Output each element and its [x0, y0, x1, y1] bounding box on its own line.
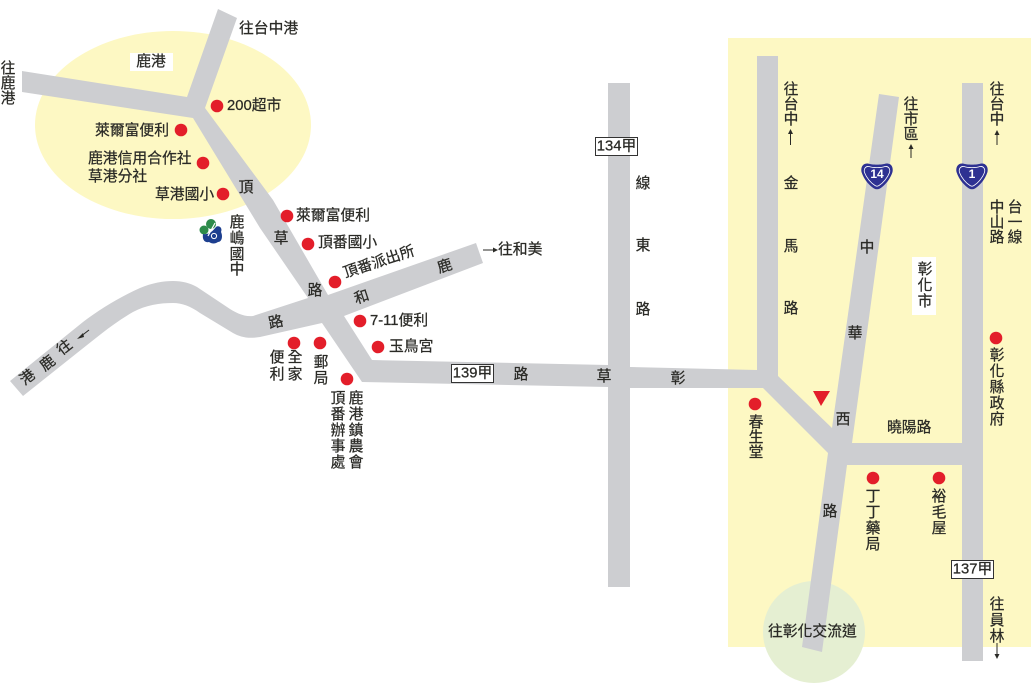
label: 往鹿港 on curved road: 往 [54, 336, 76, 359]
label: 往員林: 往員林 [990, 596, 1005, 645]
road name: 彰草路: 彰 [671, 369, 686, 387]
landmark: 玉鳥宮: 玉鳥宮 [389, 338, 433, 355]
label: 往台中港: 往台中港 [239, 20, 298, 37]
road name: 線東路: 線東路 [636, 175, 651, 318]
landmark: 鹿港信用合作社草港分社: 鹿港信用合作社 [88, 150, 192, 167]
marker: destination triangle [813, 391, 830, 406]
road name: 中華西路: 路 [823, 503, 838, 520]
landmark: 鹿港信用合作社草港分社: 草港分社 [88, 168, 147, 185]
road name: 中華西路 [823, 239, 874, 520]
label: 往彰化交流道: 往彰化交流道 [768, 622, 857, 640]
road network: Changhua side [630, 56, 983, 661]
icon: school logo [200, 219, 222, 244]
landmark: 鹿港鎮農會頂番辦事處 [331, 373, 364, 471]
route shield: 14: 14 [870, 167, 884, 181]
label: 往市區: 往市區 [904, 96, 919, 143]
label: 往台中 west: 往台中 [784, 81, 799, 128]
landmark: 萊爾富便利 Lukang: 萊爾富便利 [95, 121, 169, 139]
road name: 中山路: 中山路 [990, 199, 1005, 246]
road name: 頂草路: 頂 [239, 180, 254, 196]
road network: Lukang side [10, 9, 608, 396]
panel: Lukang area ellipse [35, 31, 311, 219]
route sign: 137甲: 137甲 [953, 561, 992, 577]
label: 往和美 with arrow: 往和美 [498, 241, 543, 258]
label: 往鹿港 on curved road [17, 336, 76, 389]
panel: Changhua city area [728, 38, 1031, 647]
route shield: 14 [861, 163, 893, 189]
landmark: 萊爾富便利: 萊爾富便利 [296, 206, 370, 224]
label: 彰化市 [912, 257, 936, 315]
landmark: 頂番派出所: 頂番派出所 [341, 242, 417, 282]
road name: 台一線: 台一線 [1008, 199, 1023, 246]
road name: 曉陽路: 曉陽路 [887, 419, 932, 436]
label: 鹿嶋國中: 鹿嶋國中 [230, 214, 245, 278]
road name: 彰草路: 草 [597, 368, 612, 385]
road name: 彰草路 [514, 366, 686, 387]
panel: interchange circle [763, 581, 865, 683]
road name: 頂草路: 路 [308, 282, 323, 299]
landmark: 玉鳥宮 [372, 338, 433, 355]
road name: 鹿和路 [267, 256, 455, 332]
arrow: toward Lukang [77, 330, 89, 339]
route sign: 139甲: 139甲 [453, 365, 492, 381]
road name: 彰草路: 路 [514, 366, 529, 383]
landmark: 鹿港鎮農會頂番辦事處: 頂番辦事處 [331, 391, 346, 471]
label: 往鹿港 on curved road: 鹿 [37, 352, 59, 375]
road name: 中華西路: 華 [848, 325, 863, 342]
road name: 頂草路: 草 [274, 230, 289, 247]
landmark: 7-11便利: 7-11便利 [370, 312, 428, 329]
road name: 鹿和路: 和 [352, 287, 371, 308]
road name: 中華西路: 中 [860, 239, 874, 256]
road name: 中華西路: 西 [836, 412, 850, 428]
landmark: 頂番國小: 頂番國小 [318, 234, 377, 251]
landmark: 全家便利 [270, 337, 303, 383]
landmark: 鹿港信用合作社草港分社 [88, 150, 209, 185]
road name: 鹿和路: 鹿 [435, 256, 455, 277]
landmark: 裕毛屋: 裕毛屋 [932, 488, 947, 537]
label: 往鹿港: 往鹿港 [1, 60, 16, 107]
label: 鹿港 area [130, 53, 173, 71]
landmark: 丁丁藥局: 丁丁藥局 [866, 489, 881, 553]
landmark: 郵局: 郵局 [314, 354, 329, 387]
label: 往鹿港 on curved road: 港 [17, 366, 39, 389]
route shield: 1: 1 [969, 167, 976, 181]
road name: 金馬路: 金馬路 [784, 175, 799, 317]
landmark: 郵局 [314, 337, 329, 387]
road name: 鹿和路: 路 [267, 313, 285, 332]
landmark: 200超市: 200超市 [227, 97, 281, 114]
landmark: 草港國小: 草港國小 [155, 186, 214, 203]
landmark: 鹿港鎮農會頂番辦事處: 鹿港鎮農會 [349, 390, 364, 471]
road: 134甲 east line [608, 83, 630, 587]
landmark: 彰化縣政府: 彰化縣政府 [990, 346, 1005, 428]
road name: 頂草路 [239, 180, 323, 299]
landmark: 春生堂: 春生堂 [749, 414, 764, 461]
route shield: 1 [956, 163, 988, 189]
landmark: 全家便利: 全家 [288, 349, 303, 383]
route sign: 134甲: 134甲 [597, 138, 636, 154]
landmark: 全家便利: 便利 [270, 349, 285, 383]
label: 往台中 east: 往台中 [990, 81, 1005, 128]
label: 鹿港 area: 鹿港 [136, 53, 166, 70]
label: 彰化市: 彰化市 [918, 260, 933, 310]
